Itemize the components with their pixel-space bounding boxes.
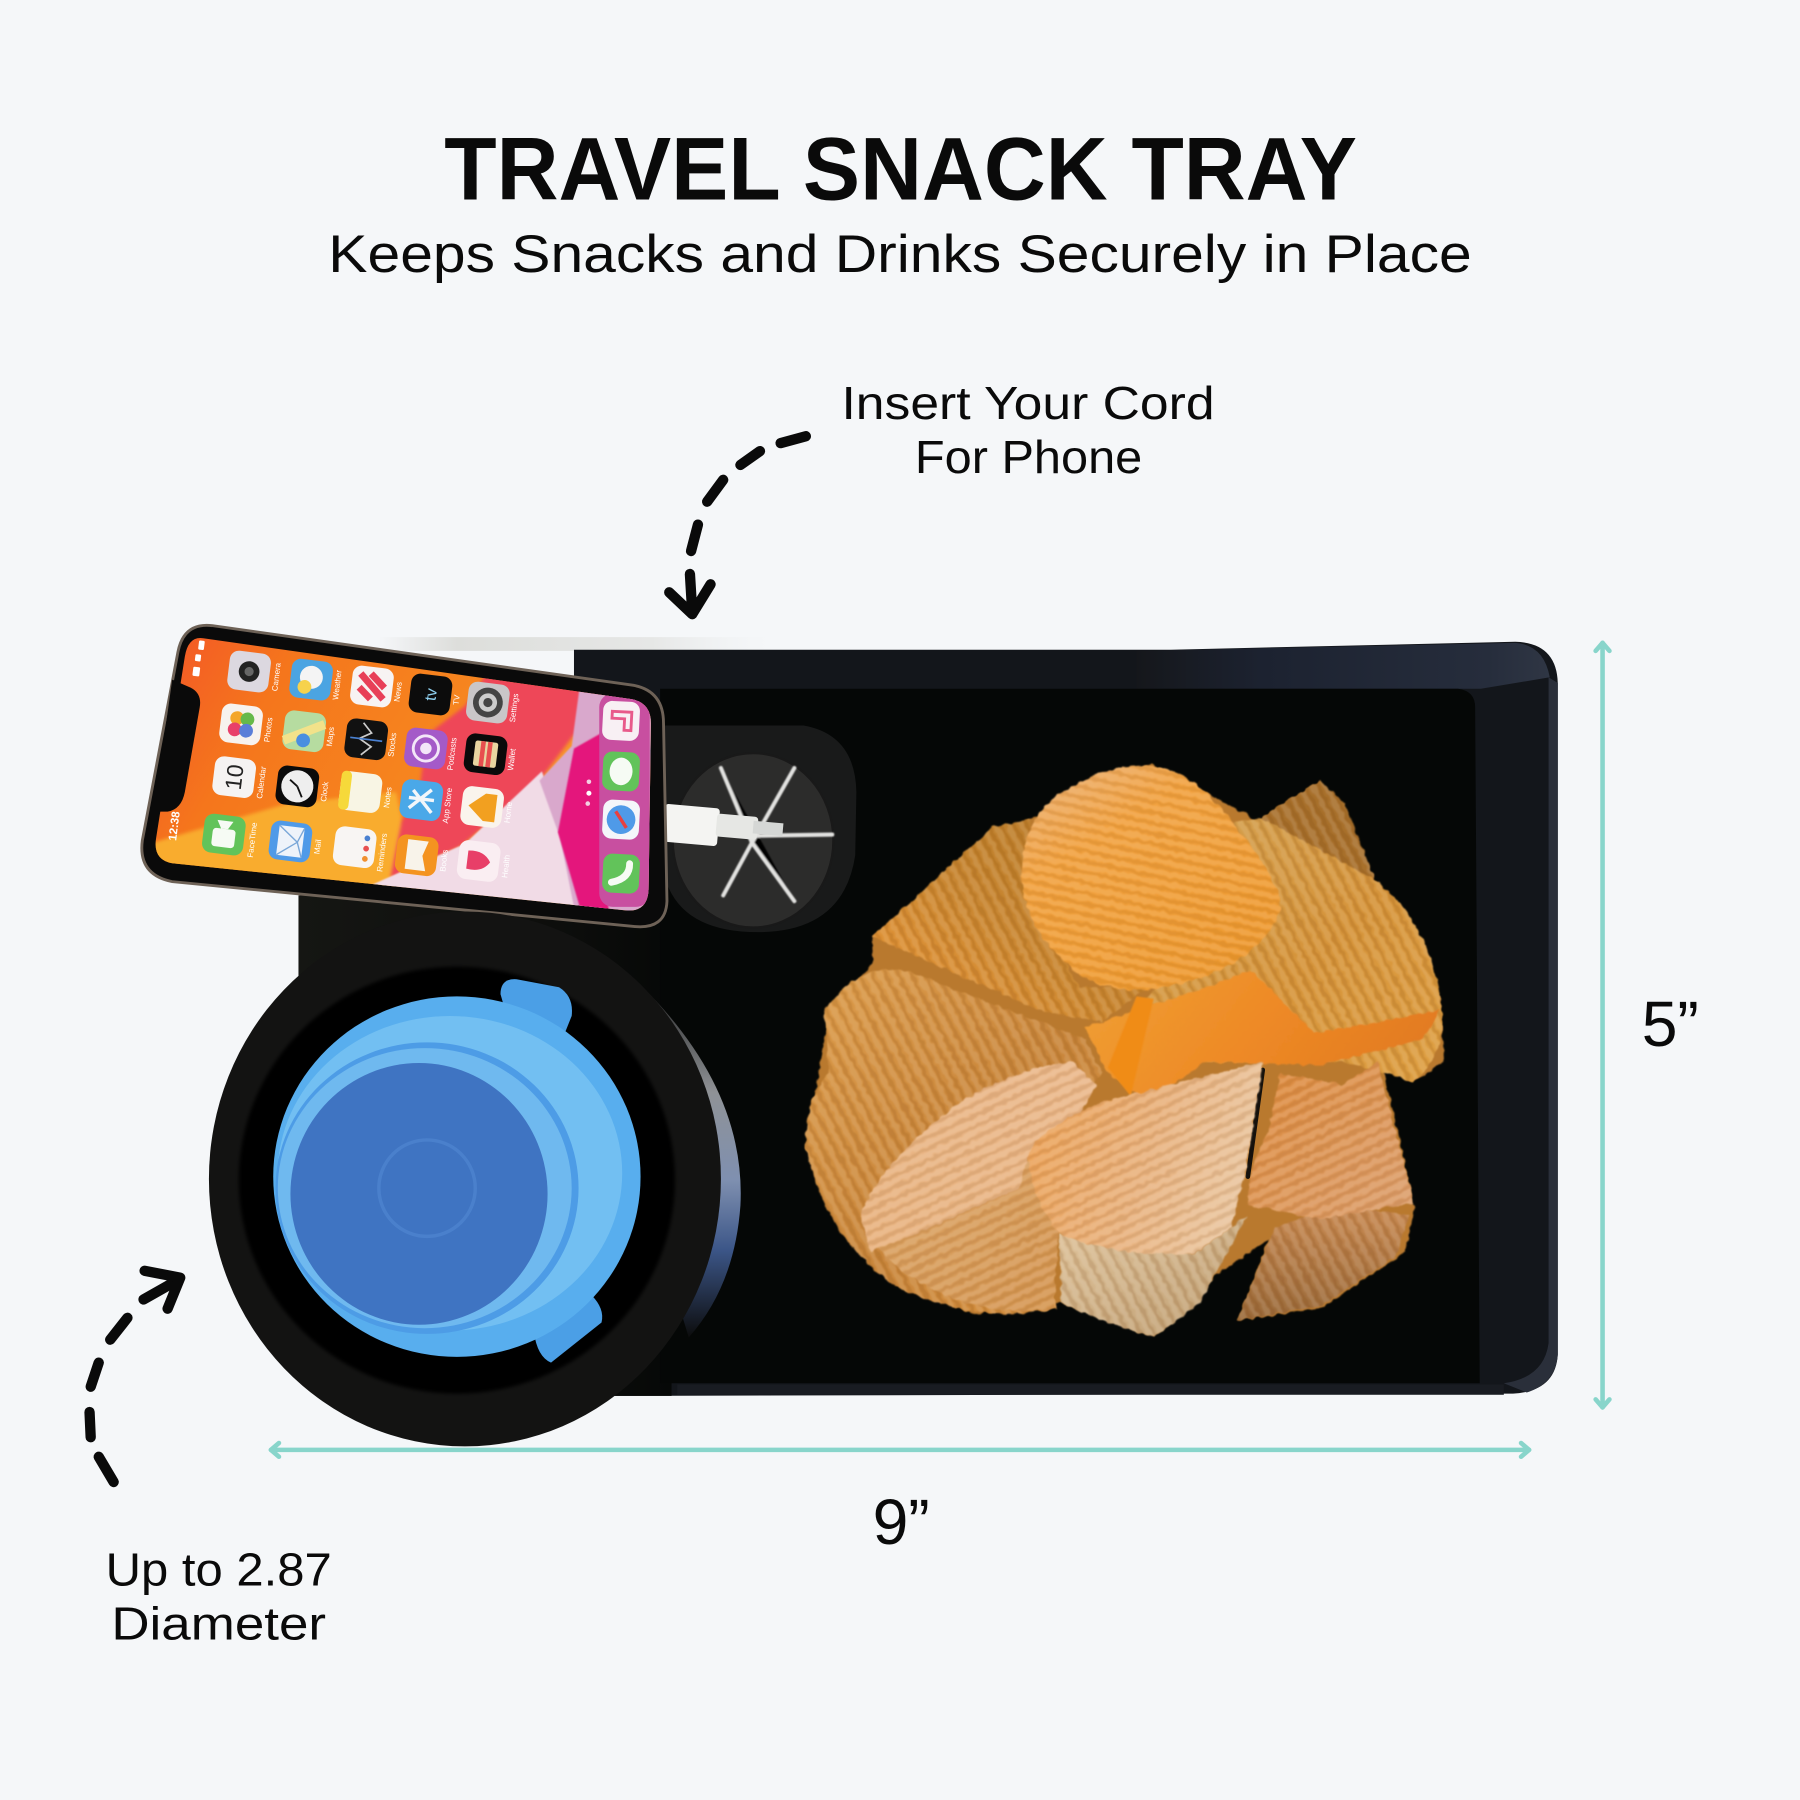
reminders — [332, 825, 378, 869]
tray shadow — [379, 637, 769, 651]
wallpaper lilac wave — [540, 686, 654, 918]
app store — [398, 778, 444, 822]
callout: insert cord: Insert Your Cord — [841, 377, 1215, 429]
app labels: News — [392, 681, 404, 702]
settings — [465, 681, 511, 724]
status bar: 12:38 — [167, 810, 183, 841]
chip: lower left tan — [867, 1148, 1058, 1311]
maps — [281, 709, 327, 753]
tv: tv — [422, 687, 441, 702]
cup holder outer ring — [209, 911, 721, 1446]
music — [602, 700, 640, 741]
app labels: Camera — [270, 662, 283, 692]
star slit — [721, 768, 832, 901]
app labels: Weather — [331, 669, 344, 701]
bottle cap ridges — [278, 1016, 622, 1330]
app labels: TV — [452, 694, 462, 706]
wallpaper base — [156, 638, 651, 910]
dimension: 9 inch label: 9” — [873, 1486, 930, 1558]
page dots — [585, 779, 591, 806]
home — [459, 785, 505, 829]
tray top band — [1136, 643, 1550, 689]
app labels — [246, 662, 520, 878]
potato chips — [806, 763, 1444, 1337]
wallpaper yellow band — [156, 791, 402, 886]
chip: bottom cream — [1058, 1217, 1247, 1337]
app labels: Calendar — [255, 766, 268, 799]
cup holder inner recess — [239, 967, 675, 1394]
app labels: Notes — [382, 787, 394, 808]
chip: centre curl — [1108, 996, 1154, 1096]
tray left block — [298, 895, 672, 1396]
dimension: 5 inch label: 5” — [1642, 988, 1699, 1060]
chip: right lower — [1249, 1062, 1414, 1219]
app icons row 1 — [226, 650, 511, 724]
mail — [268, 820, 313, 863]
callout: cup diameter — [106, 1543, 332, 1649]
tray — [298, 642, 1558, 1396]
callout: cup diameter: Up to 2.87 — [106, 1543, 332, 1595]
calendar: 10 — [220, 763, 249, 791]
chips underlay — [806, 763, 1444, 1337]
cord port — [660, 726, 856, 932]
chip: centre pale — [1027, 1062, 1263, 1254]
bottle cap outer — [273, 996, 641, 1357]
chip: right large — [1136, 817, 1442, 1081]
app labels: Reminders — [375, 833, 389, 872]
news — [349, 665, 395, 708]
app labels: Home — [503, 801, 514, 824]
notes — [338, 770, 383, 814]
tv — [408, 673, 453, 716]
facetime — [201, 813, 247, 856]
port housing — [660, 726, 856, 932]
arrow: dashed to cord port — [669, 436, 806, 614]
chip: lower left pale — [861, 1062, 1096, 1251]
chip: back right — [1257, 781, 1374, 878]
wallet — [463, 732, 508, 776]
status icons — [192, 640, 205, 677]
phone app — [602, 853, 640, 894]
app icons row 4 — [201, 813, 502, 883]
tray bottom edge — [677, 1384, 1504, 1395]
cup holder — [209, 911, 741, 1446]
tray inner well — [660, 689, 1480, 1383]
chip: lower left large — [806, 969, 1102, 1314]
dock icons — [602, 700, 640, 894]
wallpaper pale area — [372, 771, 600, 908]
podcasts — [403, 727, 449, 770]
arrow: dashed to cup holder — [90, 1271, 180, 1482]
port disc — [673, 753, 833, 928]
bottle cap centre — [290, 1063, 548, 1325]
phone body — [142, 625, 667, 927]
calendar — [211, 755, 257, 799]
tray outer frame — [459, 642, 1558, 1396]
cup holder side wall — [643, 987, 741, 1337]
safari — [602, 799, 640, 840]
bottle cap ring — [276, 1042, 579, 1334]
wallpaper magenta wave — [558, 729, 608, 913]
callout: insert cord: For Phone — [915, 431, 1142, 483]
app labels: Health — [500, 854, 512, 878]
app icons row 3 — [211, 755, 505, 829]
app labels: Books — [438, 849, 450, 872]
app labels: Wallet — [506, 747, 518, 771]
wallpaper red wave — [390, 672, 654, 878]
app labels: FaceTime — [246, 821, 259, 858]
weather — [288, 658, 334, 701]
chip crack — [1248, 1070, 1263, 1177]
dimension: height arrow — [1596, 643, 1609, 1407]
messages — [602, 751, 640, 792]
chip: orange fold — [1085, 970, 1441, 1102]
app labels: Maps — [325, 726, 336, 747]
charging cable — [662, 804, 783, 846]
chip: top left — [872, 820, 1148, 1022]
phone screen — [156, 638, 651, 910]
dock — [599, 693, 650, 907]
dimension: width arrow — [271, 1443, 1529, 1457]
chip: far bottom right — [1238, 1205, 1410, 1320]
app labels: App Store — [441, 787, 454, 824]
app labels: Podcasts — [446, 737, 459, 771]
app labels: Settings — [508, 693, 520, 723]
health — [456, 839, 502, 883]
callout: insert cord — [841, 377, 1215, 483]
chip: top round — [1022, 766, 1280, 990]
bottle bottom tab — [534, 1295, 602, 1363]
callout: cup diameter: Diameter — [111, 1597, 326, 1649]
tray right edge — [1504, 677, 1558, 1392]
photos — [218, 702, 264, 746]
bottle cap light ring — [278, 1048, 572, 1328]
stocks — [343, 717, 389, 761]
app labels: Mail — [312, 839, 323, 855]
cap centre detail — [379, 1140, 475, 1236]
app labels: Stocks — [386, 732, 398, 757]
phone — [138, 620, 667, 930]
title: TRAVEL SNACK TRAY — [444, 119, 1357, 219]
app labels: Clock — [319, 780, 330, 802]
app icons row 2 — [218, 702, 508, 776]
books — [394, 833, 440, 877]
camera — [226, 650, 272, 693]
clock — [274, 764, 320, 808]
bottle top tab — [501, 979, 572, 1039]
notch — [154, 680, 200, 812]
subtitle: Keeps Snacks and Drinks Securely in Place — [328, 225, 1472, 284]
app labels: Photos — [262, 717, 274, 743]
